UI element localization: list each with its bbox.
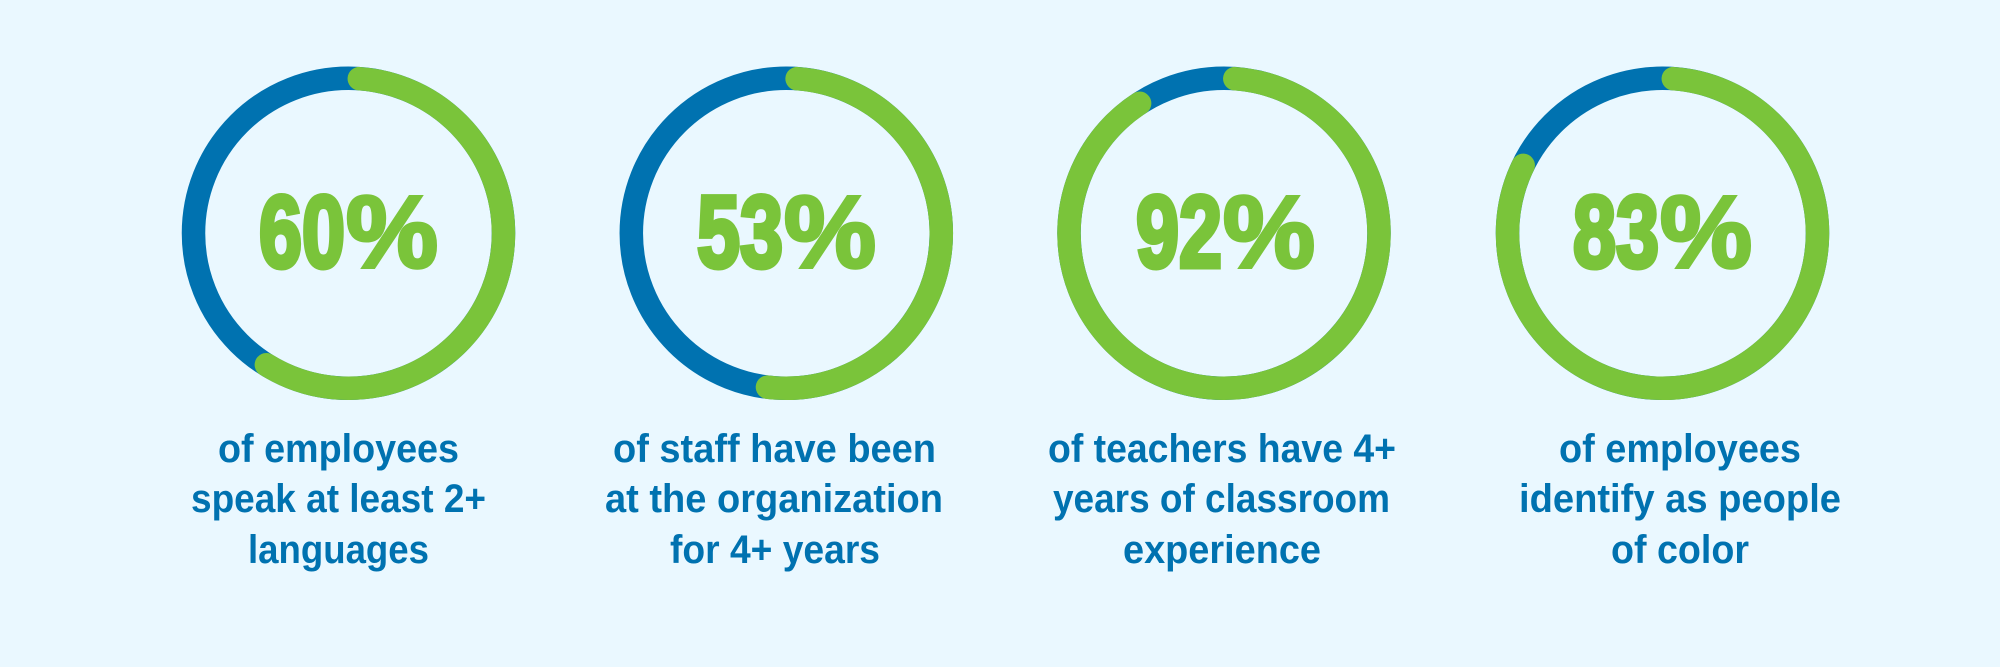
number: 53%: 53 xyxy=(697,175,783,289)
caption: staff tenure: at the organization xyxy=(605,477,943,521)
caption: people of color: of employees xyxy=(1559,427,1801,471)
number: 83%: % xyxy=(1660,175,1752,289)
panel: 83% stat xyxy=(1497,68,1841,572)
donut chart: 92% xyxy=(1059,68,1389,399)
number: 92% xyxy=(1136,175,1315,289)
number: 92%: 92 xyxy=(1136,175,1222,289)
donut chart: 83% xyxy=(1497,68,1828,399)
caption: teachers experience: of teachers have 4+ xyxy=(1048,427,1396,471)
number: 53% xyxy=(697,175,876,289)
number: 83%: 83 xyxy=(1573,175,1659,289)
caption: employees languages: of employees xyxy=(218,427,459,471)
caption: teachers experience xyxy=(1048,427,1396,572)
number: 60%: 60 xyxy=(259,175,345,289)
caption: staff tenure: of staff have been xyxy=(613,427,936,471)
caption: staff tenure xyxy=(605,427,943,572)
caption: employees languages: speak at least 2+ xyxy=(191,477,486,521)
number: 60% xyxy=(259,175,438,289)
caption: teachers experience: experience xyxy=(1123,528,1321,572)
donut chart: 60% xyxy=(183,68,514,399)
number: 53%: % xyxy=(784,175,876,289)
caption: employees languages: languages xyxy=(248,528,429,572)
donut chart: 53% xyxy=(621,68,952,399)
panel: 60% stat xyxy=(183,68,514,572)
number: 60%: % xyxy=(346,175,438,289)
caption: teachers experience: years of classroom xyxy=(1053,477,1390,521)
caption: people of color: of color xyxy=(1611,528,1749,572)
panel: 53% stat xyxy=(605,68,952,572)
panel: 92% stat xyxy=(1048,68,1396,572)
caption: staff tenure: for 4+ years xyxy=(670,528,880,572)
caption: people of color xyxy=(1519,427,1841,572)
number: 92%: % xyxy=(1223,175,1315,289)
caption: employees languages xyxy=(191,427,486,572)
caption: people of color: identify as people xyxy=(1519,477,1841,521)
number: 83% xyxy=(1573,175,1752,289)
